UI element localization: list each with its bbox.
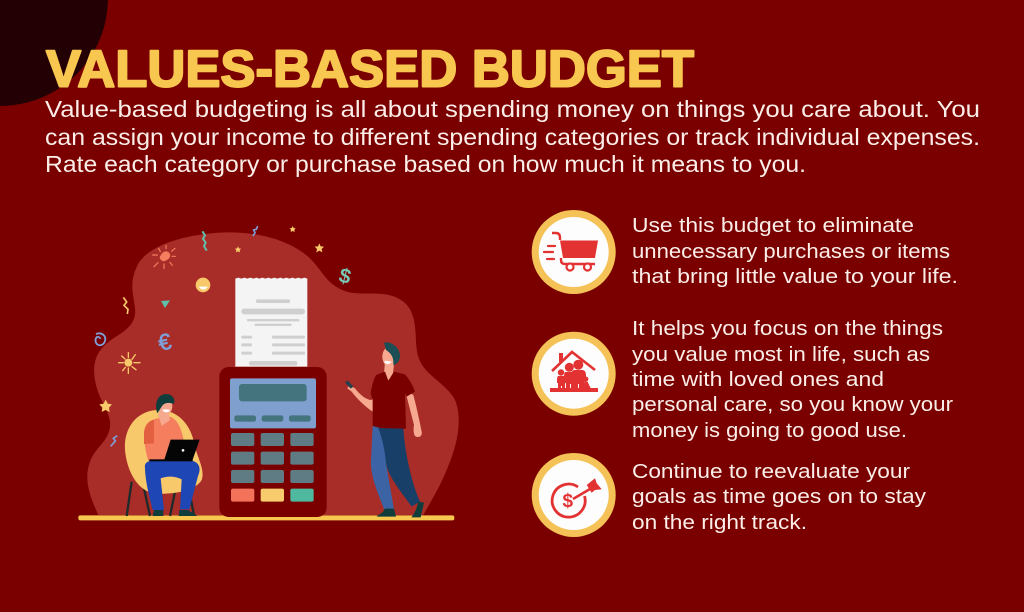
background blob [87, 232, 459, 515]
text: focus on what you value: you value most in life, such as [632, 344, 930, 366]
text: reevaluate goals: on the right track. [632, 512, 807, 534]
illustration: budget scene [78, 226, 459, 520]
payment terminal [219, 367, 327, 517]
icon: family in house [532, 332, 616, 416]
intro text block: Value-based budgeting is all about spending money on things you care about. You [45, 96, 980, 122]
text: eliminate purchases: that bring little value to your life. [632, 266, 958, 288]
text: focus on what you value [632, 318, 953, 442]
receipt [235, 278, 307, 367]
person sitting with laptop [125, 394, 203, 516]
text: reevaluate goals [632, 461, 926, 534]
text: focus on what you value: personal care, so you know your [632, 394, 953, 416]
decorative icons: currency, stars, confetti: $ [337, 264, 354, 289]
text: reevaluate goals: Continue to reevaluate your [632, 461, 910, 483]
text: eliminate purchases: unnecessary purchases or items [632, 241, 950, 263]
floor line [78, 515, 454, 520]
text: eliminate purchases [632, 215, 958, 288]
person standing with phone [345, 342, 424, 517]
icon: shopping cart [532, 210, 616, 294]
icon: dollar target with arrow: $ [562, 491, 574, 512]
title: VALUES-BASED BUDGET [46, 40, 694, 98]
intro text block: Rate each category or purchase based on how much it means to you. [45, 151, 806, 177]
text: eliminate purchases: Use this budget to eliminate [632, 215, 914, 237]
decorative icons: currency, stars, confetti [96, 226, 354, 446]
intro text block [45, 96, 980, 177]
text: reevaluate goals: goals as time goes on to stay [632, 486, 926, 508]
text: focus on what you value: money is going to good use. [632, 420, 907, 442]
text: focus on what you value: It helps you focus on the things [632, 318, 943, 340]
text: focus on what you value: time with loved ones and [632, 369, 884, 391]
decorative icons: currency, stars, confetti: € [156, 328, 174, 356]
icon: dollar target with arrow [532, 453, 616, 537]
intro text block: can assign your income to different spending categories or track individual expenses. [45, 124, 980, 150]
